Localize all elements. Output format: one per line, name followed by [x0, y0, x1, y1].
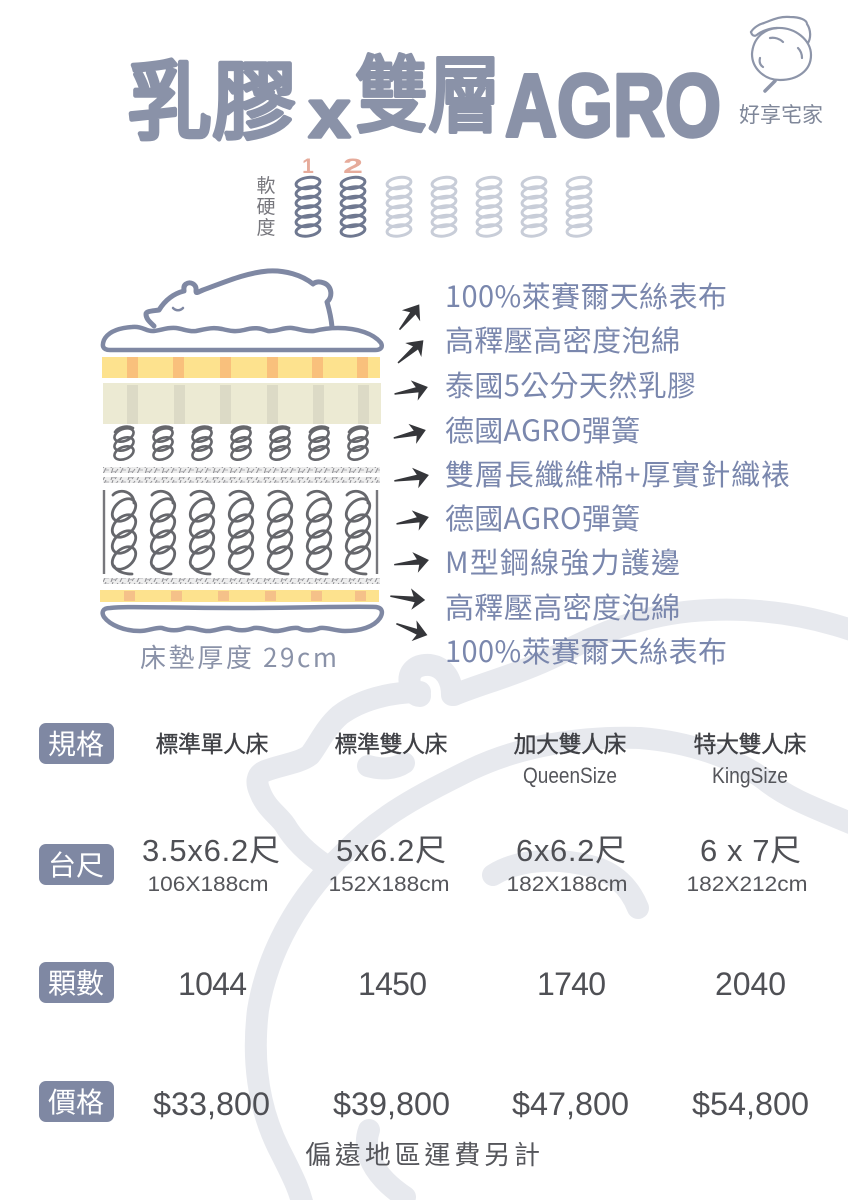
bottom memory foam layer [100, 590, 379, 602]
row: price: $33,800 [153, 1086, 270, 1122]
row: price: $39,800 [333, 1086, 450, 1122]
row: dimensions: 6x6.2尺 [516, 833, 626, 868]
feature list: 德國AGRO彈簧 [445, 496, 640, 538]
M-type steel edge wires [104, 490, 377, 574]
feature list: 雙層長纖維棉+厚實針織裱 [445, 452, 790, 494]
lower springs [108, 491, 374, 574]
row: dimensions: 3.5x6.2尺 [142, 833, 280, 868]
row: size: KingSize [712, 763, 788, 788]
row: dimensions: 182X212cm [686, 873, 808, 896]
upper springs [112, 426, 370, 462]
row: dimensions: 152X188cm [328, 873, 450, 896]
title: x [309, 76, 350, 152]
row: price: $54,800 [692, 1086, 809, 1122]
feature list: 高釋壓高密度泡綿 [445, 585, 680, 627]
background: large bear outline [256, 610, 848, 1200]
row: dimensions: 106X188cm [148, 873, 268, 896]
row: size: 標準單人床 [156, 725, 268, 759]
feature list: 高釋壓高密度泡綿 [445, 318, 680, 360]
arrows [389, 298, 431, 646]
row: coil count: 1740 [537, 966, 606, 1002]
top cover fabric [103, 327, 382, 350]
firmness numbers: 1 [302, 155, 314, 178]
logo text: 好享宅家 [739, 99, 823, 129]
title: 雙層 [355, 29, 501, 150]
firmness scale [256, 155, 592, 240]
logo: bear on lollipop [751, 17, 811, 91]
badge: price: 價格 [48, 1081, 104, 1121]
row: dimensions: 6 x 7尺 [700, 833, 801, 868]
row: size [39, 723, 806, 788]
row: dimensions: 182X188cm [506, 873, 628, 896]
row: size: 加大雙人床 [514, 725, 626, 759]
feature list: 100%萊賽爾天絲表布 [445, 629, 727, 671]
row: coil count: 2040 [715, 966, 786, 1002]
firmness numbers: 2 [343, 155, 363, 178]
cotton and knit layers [103, 467, 380, 584]
feature list [445, 274, 790, 671]
mattress thickness label: 床墊厚度 29cm [140, 638, 337, 675]
sleeping bear [146, 271, 332, 327]
row: size: 標準雙人床 [334, 725, 448, 759]
feature list: 德國AGRO彈簧 [445, 408, 640, 450]
badge: dimensions: 台尺 [48, 844, 104, 884]
firmness label: 軟 [256, 171, 276, 198]
bottom cover fabric [103, 607, 382, 631]
row: size: 特大雙人床 [694, 725, 806, 759]
firmness label [256, 171, 276, 240]
row: price [39, 1081, 809, 1122]
title: 乳膠 [127, 32, 297, 157]
row: size: QueenSize [523, 763, 617, 788]
row: dimensions [39, 833, 808, 896]
firmness label: 硬 [256, 192, 276, 219]
firmness label: 度 [256, 213, 276, 240]
feature list: 100%萊賽爾天絲表布 [445, 274, 727, 316]
badge: size: 規格 [48, 723, 104, 763]
row: dimensions: 5x6.2尺 [336, 833, 446, 868]
feature list: M型鋼線強力護邊 [445, 540, 680, 582]
footnote: 偏遠地區運費另計 [305, 1135, 540, 1172]
badge: coil count: 顆數 [48, 962, 104, 1002]
row: coil count: 1044 [178, 966, 247, 1002]
row: coil count [39, 962, 786, 1003]
feature list: 泰國5公分天然乳膠 [445, 363, 696, 405]
title [127, 29, 721, 157]
mattress diagram [100, 271, 382, 675]
row: coil count: 1450 [358, 966, 427, 1002]
top memory foam layer [102, 357, 380, 378]
latex layer [103, 383, 381, 424]
title: AGRO [505, 55, 721, 155]
row: price: $47,800 [512, 1086, 629, 1122]
firmness numbers [302, 155, 363, 178]
firmness springs [295, 176, 592, 238]
